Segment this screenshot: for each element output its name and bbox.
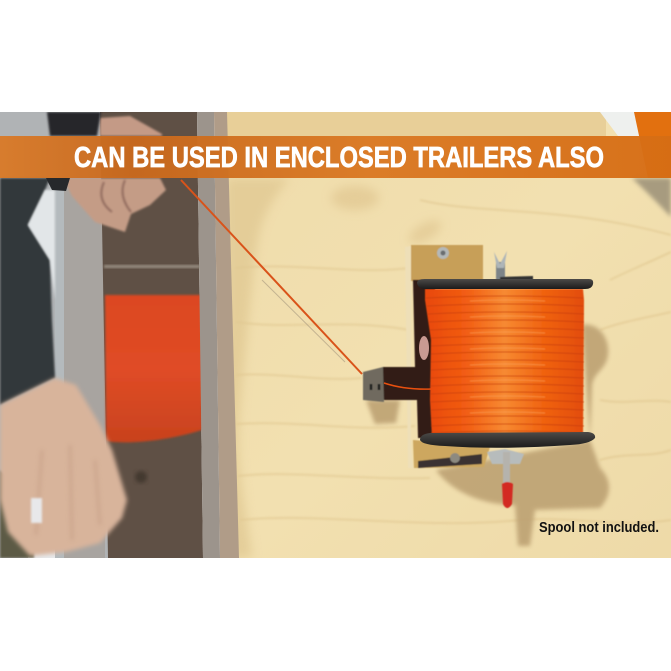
- shadow on plywood from door edge: [229, 178, 286, 558]
- glove handle: [0, 470, 34, 558]
- spool top bolt and wingnut: [494, 251, 533, 280]
- guide bracket: [363, 367, 384, 402]
- plywood wall: [220, 112, 671, 558]
- infographic: product photo with banner: [0, 112, 671, 558]
- bottom bolt with red cap: [487, 449, 524, 508]
- spool of orange trimmer line: [425, 289, 584, 438]
- window light behind sleeve: [28, 190, 55, 300]
- orange line being pulled: [181, 180, 362, 374]
- line shadow: [262, 280, 345, 362]
- white glove cuff detail: [31, 498, 42, 523]
- line to spool: [384, 383, 432, 389]
- spool bottom flange: [420, 432, 595, 448]
- wood block top: [405, 245, 483, 468]
- wood block bottom: [413, 440, 490, 468]
- blurred spinning spool: [105, 295, 202, 442]
- banner: translucent orange band: [0, 136, 671, 178]
- cuff: [47, 112, 101, 136]
- note: spool not included: Spool not included.: [539, 520, 659, 536]
- person: sleeve: [0, 178, 55, 405]
- dark trailer interior panel: [100, 112, 203, 558]
- bracket plate: [363, 280, 435, 438]
- spool shadow: [366, 325, 609, 546]
- lower hand: [0, 378, 127, 556]
- door frame strips: [197, 112, 239, 558]
- left background: [0, 112, 110, 558]
- photo: trailer wall with spool holder: [0, 112, 671, 558]
- upper hand: [63, 116, 166, 232]
- orange object top right: [600, 112, 671, 217]
- bracket knob: [419, 336, 429, 360]
- spool top flange: [417, 279, 593, 289]
- door bolt: [135, 471, 147, 483]
